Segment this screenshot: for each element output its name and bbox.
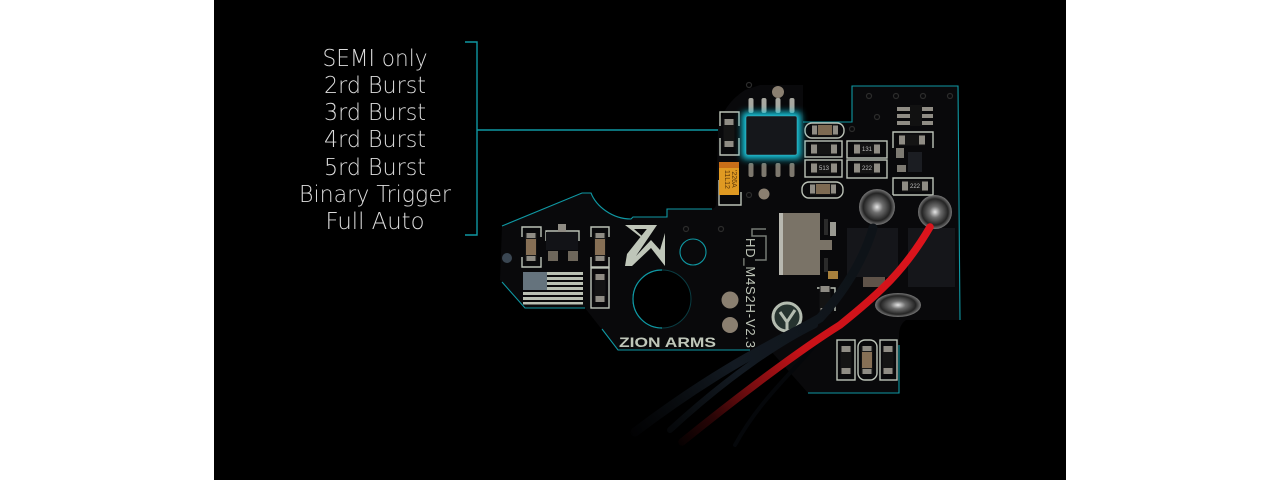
orange tantalum capacitor: 11L12 — [723, 170, 730, 189]
orange tantalum capacitor: '226A — [730, 170, 737, 188]
small surface mount parts: 131 — [862, 147, 873, 153]
via holes — [684, 82, 952, 232]
small surface mount parts — [526, 119, 928, 374]
board model label: HD_M4S2H-V2.3 — [743, 238, 758, 348]
black background panel — [214, 0, 1066, 480]
firing modes list: Binary Trigger — [299, 180, 451, 208]
red wire — [682, 227, 930, 442]
SOT transistor on left wing — [546, 224, 578, 261]
left wing grey pad — [502, 253, 512, 263]
X logo mark — [625, 225, 665, 266]
highlighted microchip — [742, 112, 801, 159]
firing modes list: SEMI only — [322, 44, 428, 72]
right regulator chip and transistor — [896, 105, 933, 172]
firing modes list: Full Auto — [326, 207, 424, 235]
small surface mount parts: 513 — [819, 166, 830, 172]
solder test points — [722, 86, 784, 333]
brand name: ZION ARMS — [619, 334, 716, 350]
American flag — [523, 272, 583, 304]
firing modes list: 5rd Burst — [324, 153, 426, 181]
large mounting hole — [633, 270, 691, 328]
bracket and leader line — [465, 42, 746, 235]
orange tantalum capacitor — [719, 162, 739, 195]
firing modes list: 3rd Burst — [324, 98, 426, 126]
firing modes list: 4rd Burst — [324, 125, 426, 153]
board teal edges — [502, 86, 960, 393]
small surface mount parts: 222 — [910, 184, 921, 190]
slide switch — [752, 213, 838, 279]
firing modes list: 2rd Burst — [324, 71, 426, 99]
top chip pins — [748, 98, 794, 177]
silkscreen outlines — [522, 112, 933, 380]
circuit board — [500, 82, 960, 445]
solder joints — [859, 189, 952, 317]
small surface mount parts: 222 — [862, 166, 873, 172]
board body — [500, 85, 960, 393]
large mounting hole teal arc — [633, 270, 662, 328]
recycling style mark — [773, 303, 801, 331]
firing modes list — [299, 44, 451, 235]
MOSFET packages — [847, 228, 955, 287]
black wires — [635, 228, 873, 445]
